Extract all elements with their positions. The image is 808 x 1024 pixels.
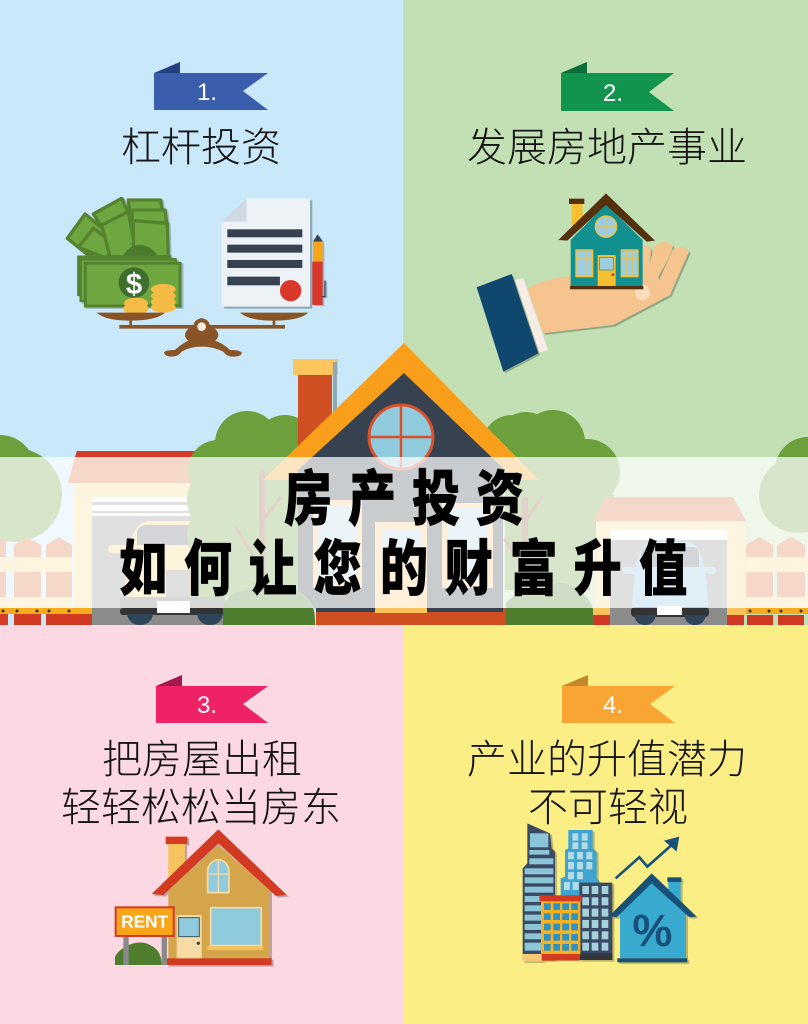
heading 4 line 2: 不可轻视	[528, 786, 688, 830]
left car bumper and wheels	[120, 597, 225, 625]
tall tower	[523, 823, 555, 961]
panel: pink background	[0, 625, 404, 1024]
main title	[119, 466, 687, 603]
far right tree	[759, 437, 808, 533]
big window	[208, 908, 263, 950]
title line 2: 如何让您的财富升值	[119, 536, 687, 603]
left back tree	[187, 411, 315, 597]
heading 3 line 2: 轻轻松松当房东	[61, 786, 341, 830]
icon: money and contract on scale	[67, 198, 325, 357]
heading 1: 杠杆投资	[121, 126, 281, 170]
street scene	[0, 343, 808, 625]
heading 3 line 1: 把房屋出租	[102, 738, 302, 782]
right car	[622, 542, 716, 625]
percent house: %	[632, 905, 672, 956]
contract document	[222, 198, 310, 307]
panel: green background	[403, 0, 808, 625]
ribbon 2	[561, 62, 674, 111]
ribbon 2: 2.	[603, 80, 623, 107]
door	[177, 915, 202, 958]
left fence	[0, 537, 92, 614]
rent sign	[116, 907, 174, 936]
bushes	[223, 583, 595, 625]
icon: house on open hand	[477, 193, 689, 372]
left house	[68, 451, 225, 625]
yellow building	[539, 895, 582, 961]
right house	[593, 497, 746, 625]
cuff	[515, 278, 548, 353]
heading 4	[467, 738, 747, 830]
tree trunks	[236, 473, 542, 590]
ribbon 3: 3.	[197, 692, 217, 719]
back bills	[67, 198, 168, 258]
ground strip	[0, 608, 804, 625]
right back tree	[482, 410, 620, 590]
percent house	[609, 873, 697, 962]
rent sign: RENT	[121, 912, 169, 932]
arched window	[208, 860, 229, 893]
heading 4 line 1: 产业的升值潜力	[467, 738, 747, 782]
ribbon 4	[562, 675, 675, 723]
hand	[527, 242, 689, 333]
blue tower	[561, 830, 599, 903]
right fence	[746, 537, 808, 614]
heading 3	[61, 738, 341, 830]
pen	[312, 234, 325, 305]
far left tree	[0, 435, 62, 542]
title line 1: 房产投资	[284, 466, 524, 533]
bush	[115, 942, 162, 965]
icon: rental house	[115, 829, 287, 965]
house body	[152, 829, 287, 965]
dark building	[579, 883, 612, 960]
growth arrow	[616, 837, 679, 878]
sign posts	[123, 937, 167, 965]
panel: yellow background	[404, 625, 808, 1024]
left car	[108, 521, 240, 598]
icon: city buildings and growth	[523, 823, 697, 962]
small house	[558, 193, 655, 289]
coins	[123, 284, 176, 315]
heading 2: 发展房地产事业	[467, 126, 747, 170]
thumb highlight	[635, 285, 650, 301]
panel: blue background	[0, 0, 403, 625]
front bills	[78, 245, 180, 306]
balance scale	[97, 313, 308, 357]
sleeve	[477, 274, 538, 372]
front bills: $	[126, 268, 142, 301]
main house	[263, 343, 539, 625]
ribbon 3	[156, 675, 268, 723]
ribbon 4: 4.	[603, 692, 623, 719]
ribbon 1	[154, 62, 268, 110]
translucent title band	[0, 457, 808, 608]
ribbon 1: 1.	[197, 79, 217, 106]
